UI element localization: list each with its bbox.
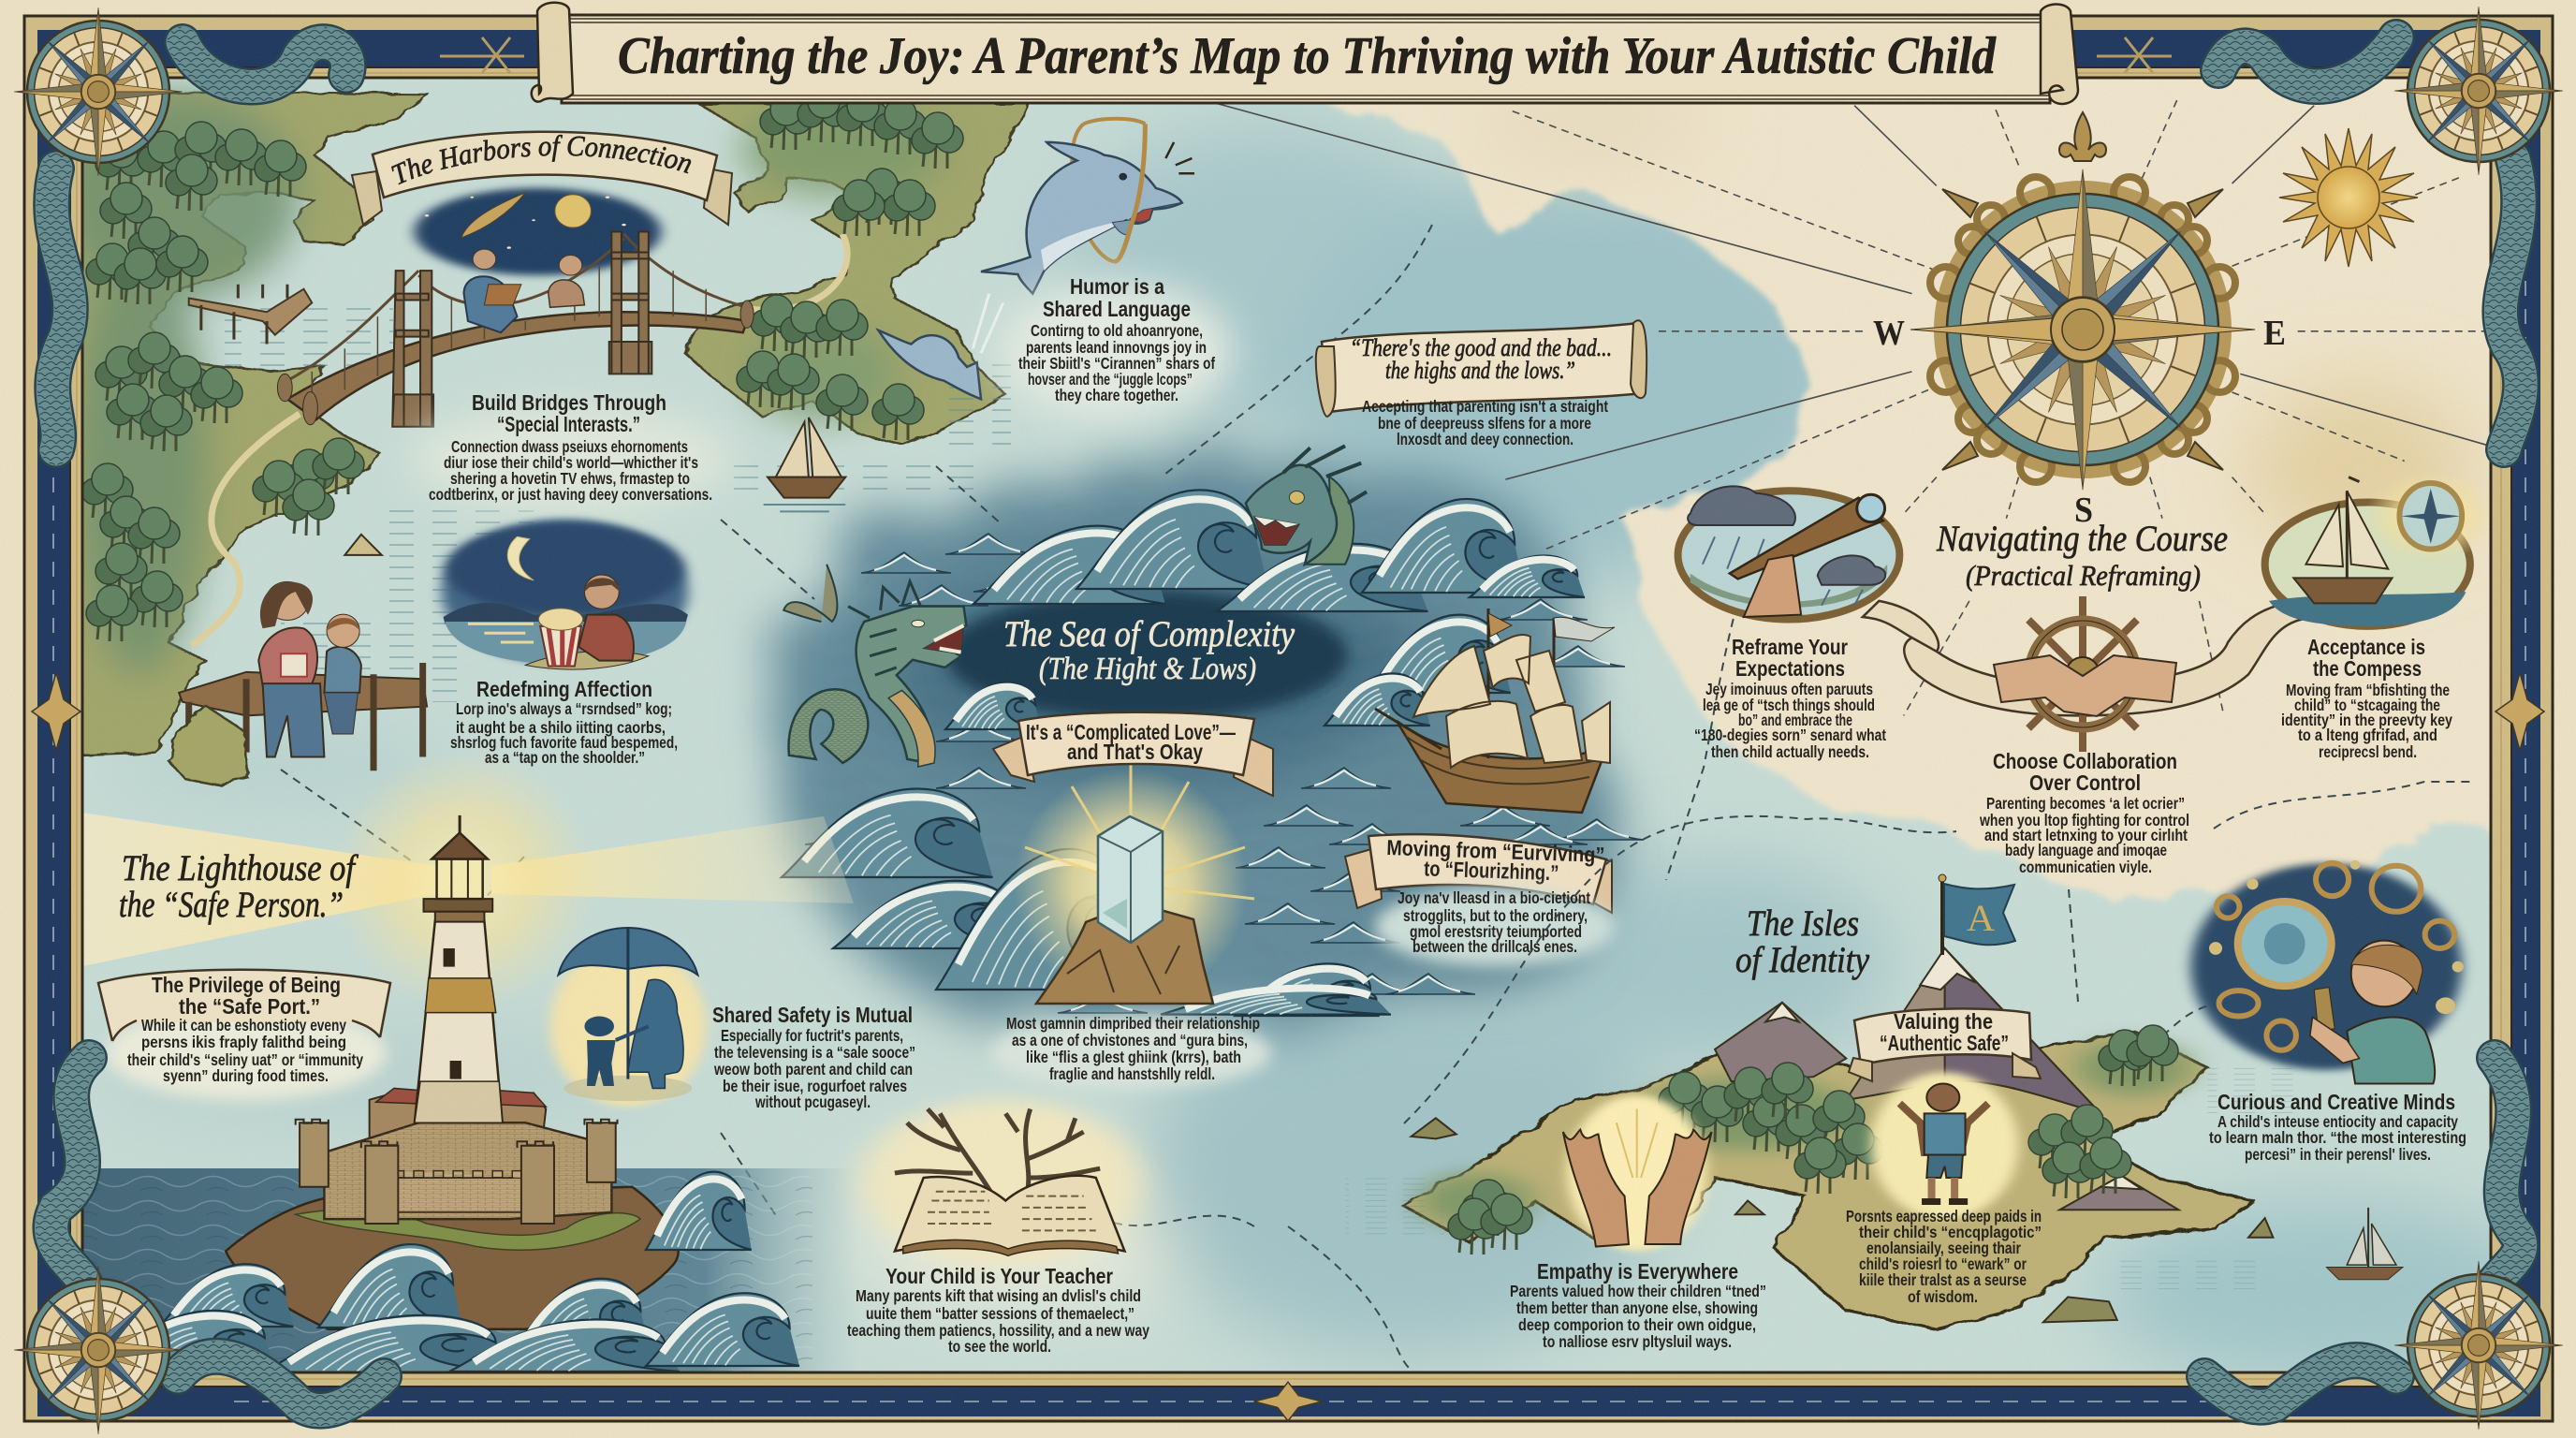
heading: isles of identity: of Identity — [1735, 940, 1870, 980]
ribbon: surviving to flourishing: to “Flourizhing.” — [1424, 856, 1559, 885]
text: choose collaboration — [1979, 749, 2189, 876]
heading: lighthouse — [119, 848, 359, 925]
text: acceptance: reciprecsl bend. — [2319, 742, 2417, 761]
dark heading field — [945, 590, 1348, 721]
lighthouse tower — [415, 815, 503, 1123]
text: shared safety — [712, 1003, 915, 1111]
text: crystal: like “flis a glest ghiink (krrs), bath — [1026, 1048, 1241, 1066]
land: harbors left and top — [50, 92, 1031, 756]
central dark sea — [774, 461, 1601, 1020]
text: your child is your teacher: teaching them patiencs, hossility, and a new way — [847, 1321, 1149, 1340]
text: moving body — [1375, 888, 1615, 966]
text: shared safety: Especially for fuctrit's parents, — [721, 1026, 903, 1045]
text: reframe: Reframe Your — [1732, 635, 1848, 659]
medallion: ship and compass — [2265, 470, 2496, 626]
title: Charting the Joy: A Parent’s Map to Thriving with Your Autistic Child — [618, 27, 1997, 85]
text: quote body: Accepting that parenting isn't a straight — [1362, 397, 1608, 416]
fleur de lis — [2059, 112, 2106, 161]
heading: The Sea of Complexity: The Sea of Complexity — [1003, 614, 1295, 654]
text: humor is a shared language: Contirng to old ahoanryone, — [1031, 321, 1203, 340]
parchment land of the compass — [1328, 79, 2490, 904]
text: redefining affection: Redefming Affection — [476, 677, 652, 701]
text: island body: child's roiesrl to “ewark” or — [1859, 1255, 2027, 1273]
text: island body: Porsnts eapressed deep paids in — [1846, 1207, 2042, 1225]
text: safe port body: persns ikis fraply falithd being — [141, 1033, 346, 1051]
sailing ship — [1375, 609, 1615, 813]
heading: navigating the course — [1936, 519, 2228, 592]
ribbon: complicated love: and That's Okay — [1067, 740, 1203, 764]
text: empathy: them better than anyone else, showing — [1516, 1299, 1758, 1317]
island trees — [1448, 1025, 2178, 1255]
heading: lighthouse: The Lighthouse of — [122, 848, 359, 888]
medallion: spyglass — [1678, 486, 1899, 620]
text: redefining affection: Lorp ino's always a “rsrndsed” kog; — [456, 699, 672, 718]
night sky above bridge — [415, 188, 661, 275]
text: curious minds: percesi” in their perensl' lives. — [2245, 1145, 2431, 1164]
text: choose collaboration: communicatien viyle. — [2019, 858, 2152, 876]
text: build bridges — [412, 390, 730, 510]
small chop waves — [805, 534, 1644, 1013]
icon: cupped hands with light — [1563, 1095, 1712, 1251]
compass letters: W — [1873, 314, 1905, 353]
text: choose collaboration: Over Control — [2029, 770, 2141, 795]
text: empathy: deep comporion to their own oidgue, — [1518, 1315, 1756, 1334]
flag with letter A — [1939, 874, 2015, 955]
ribbon: complicated love — [993, 712, 1273, 796]
left coast — [50, 92, 427, 756]
corner compass top right — [2394, 7, 2563, 175]
heading: navigating the course: (Practical Reframing) — [1966, 559, 2201, 592]
text: island body: their child's “encqplagotic” — [1859, 1223, 2042, 1241]
lighthouse sea — [82, 1168, 859, 1379]
text: reframe — [1694, 635, 1886, 761]
text: build bridges: diur iose their child's world—whicther it's — [444, 453, 698, 472]
text: moving body: strogglits, but to the ordinery, — [1403, 906, 1588, 925]
icon: umbrella over parent and child — [550, 928, 706, 1107]
text: shared safety: weow both parent and child can — [713, 1060, 913, 1078]
text: humor is a shared language — [999, 274, 1233, 421]
castle — [296, 1088, 618, 1224]
icon: small sailboat — [764, 418, 845, 511]
pier — [189, 285, 312, 345]
text: moving body: between the drillcals enes. — [1412, 937, 1577, 956]
main compass rose — [1910, 169, 2255, 490]
lighthouse beams — [82, 749, 854, 1011]
ribbon: surviving to flourishing: Moving from “Eurviving” — [1386, 835, 1605, 867]
heading: lighthouse: the “Safe Person.” — [119, 885, 344, 925]
icon: ship wheel and handshake — [1994, 596, 2176, 752]
text: your child is your teacher: Many parents kift that wising an dvlisl's child — [856, 1286, 1141, 1305]
text: curious minds: Curious and Creative Minds — [2217, 1090, 2455, 1114]
text: quote body — [1362, 397, 1608, 448]
sea serpent top — [1246, 446, 1367, 565]
waves: top crest line — [945, 490, 1585, 729]
waves: lower left of crystal — [782, 788, 1391, 1016]
small island — [168, 705, 250, 785]
text: reframe: bo” and embrace the — [1738, 711, 1852, 729]
front waves — [103, 1172, 799, 1372]
text: redefining affection: shsrlog fuch favorite faud bespemed, — [450, 733, 678, 752]
ribbon: authentic self — [1849, 1008, 2041, 1081]
text: safe port body — [127, 1016, 363, 1085]
banner: The Harbors of Connection: The Harbors of Connection — [391, 135, 691, 185]
ribbon: safe port: The Privilege of Being — [152, 973, 341, 997]
text: acceptance: the Compess — [2313, 656, 2422, 681]
text: empathy — [1510, 1259, 1766, 1351]
text: reframe: Jey imoinuus often paruuts — [1705, 680, 1873, 698]
compass letters: E — [2263, 314, 2286, 353]
heading: isles of identity: The Isles — [1747, 903, 1859, 944]
island: isles of identity — [1345, 948, 2305, 1329]
text: humor is a shared language: hovser and the “juggle lcops” — [1028, 370, 1193, 389]
text: shared safety: Shared Safety is Mutual — [712, 1003, 913, 1027]
banner: The Harbors of Connection — [350, 131, 734, 227]
text: humor is a shared language: they chare together. — [1055, 386, 1178, 404]
text: redefining affection: as a “tap on the shoolder.” — [485, 748, 645, 767]
text: island body: enolansiaily, seeing thair — [1866, 1239, 2021, 1257]
bridge with parent and child reading — [277, 231, 754, 427]
text: reframe: Expectations — [1735, 656, 1845, 681]
text: choose collaboration: and start letnxing to your cirlıht — [1984, 826, 2188, 844]
heading: navigating the course: Navigating the Course — [1936, 519, 2228, 559]
text: acceptance: Acceptance is — [2307, 635, 2425, 659]
corner compass bottom left — [14, 1266, 183, 1434]
water hatching — [225, 300, 1011, 702]
quote scroll — [1316, 320, 1647, 417]
parent and child on dock — [179, 581, 427, 770]
child figure with raised arms — [1871, 1072, 2019, 1219]
small ship and rocks near isles — [1412, 1118, 2403, 1322]
text: your child is your teacher: Your Child is Your Teacher — [886, 1264, 1113, 1288]
radiating chart lines from compass — [1124, 78, 2486, 715]
text: shared safety: without pcugaseyl. — [754, 1093, 871, 1111]
text: redefining affection: it aught be a shilo iitting caorbs, — [456, 718, 666, 737]
text: shared safety: the televensing is a “sale sooce” — [714, 1043, 915, 1062]
text: crystal: fraglie and hanstshlly reldl. — [1049, 1064, 1215, 1083]
icon: open book with tree — [862, 1100, 1141, 1265]
text: safe port body: While it can be eshonstioty eveny — [141, 1016, 346, 1034]
text: acceptance: child” to “stcagaing the — [2294, 696, 2440, 714]
crystal on rock with glow — [1014, 763, 1254, 1004]
rocky island — [226, 1187, 679, 1329]
corner compass top left — [14, 7, 183, 176]
text: crystal: as a one of chvistones and “gura bins, — [1012, 1031, 1248, 1049]
text: your child is your teacher: uuite them “batter sessions of themaelect,” — [866, 1304, 1134, 1323]
text: reframe: “180-degies sorn” senard what — [1694, 726, 1886, 744]
text: humor is a shared language: parents leand innovngs joy in — [1026, 338, 1207, 357]
text: choose collaboration: Choose Collaboration — [1993, 749, 2177, 773]
ribbon linking medallions — [1863, 601, 2302, 715]
text: build bridges: Connection dwass pseiuxs ehornoments — [451, 437, 688, 456]
text: reframe: then child actually needs. — [1711, 742, 1869, 761]
sandy path — [192, 234, 847, 646]
text: island body: of wisdom. — [1908, 1287, 1978, 1306]
text: your child is your teacher: to see the world. — [948, 1337, 1051, 1356]
text: crystal: Most gamnin dimpribed their relationship — [1006, 1014, 1260, 1033]
text: moving body: Joy na'v lleasd in a bio-cietiont — [1398, 888, 1590, 907]
compass letters: S — [2074, 491, 2093, 530]
text: build bridges: “Special Interasts.” — [497, 412, 640, 436]
parchment stains — [1479, 84, 2471, 552]
ribbon: complicated love: It's a “Complicated Love”— — [1026, 720, 1236, 744]
ribbon: safe port: the “Safe Port.” — [179, 994, 320, 1019]
vignette: curious mind with magnifier — [2191, 860, 2464, 1084]
icon: dolphin jumping through hoop — [878, 119, 1194, 399]
night vignette with popcorn — [442, 520, 688, 669]
text: island body: kiile their tralst as a seurse — [1859, 1270, 2027, 1289]
text: your child is your teacher — [847, 1264, 1149, 1356]
text: empathy: Empathy is Everywhere — [1537, 1259, 1738, 1284]
icon: sun — [2279, 128, 2418, 267]
text: quote body: lnxosdt and deey connection. — [1397, 430, 1573, 448]
green land washes — [56, 94, 945, 674]
forest trees — [81, 86, 963, 641]
corner compass bottom right — [2394, 1261, 2563, 1430]
ribbon: surviving to flourishing — [1345, 834, 1612, 913]
text: humor is a shared language: Shared Language — [1043, 297, 1191, 321]
top right peninsula — [685, 103, 1031, 445]
text: humor is a shared language: their Sbiitl's “Cirannen” shars of — [1018, 354, 1215, 373]
text: choose collaboration: when you ltop fighting for control — [1979, 811, 2189, 829]
text: moving body: gmol erestsrity teiumported — [1410, 922, 1582, 941]
compass letters — [1873, 314, 2286, 530]
text: empathy: Parents valued how their children “tned” — [1510, 1282, 1766, 1300]
text: humor is a shared language: Humor is a — [1070, 274, 1164, 299]
text: choose collaboration: Parenting becomes ‘a let ocrier” — [1986, 794, 2185, 813]
text: curious minds — [2209, 1090, 2466, 1164]
text: reframe: lea ge of “tsch things should — [1703, 696, 1875, 714]
ribbon: authentic self: Valuing the — [1894, 1009, 1993, 1034]
text: quote body: bne of deepreuss slfens for a more — [1378, 414, 1591, 433]
text: acceptance: Moving fram “bfishting the — [2286, 681, 2450, 699]
left sea dragon — [783, 565, 966, 767]
dashed route lines — [281, 225, 2471, 1372]
title scroll — [532, 3, 2078, 104]
heading: isles of identity — [1735, 903, 1870, 980]
text: curious minds: to learn maln thor. “the most interesting — [2209, 1128, 2466, 1147]
scroll ornaments — [1930, 177, 2235, 482]
quote scroll: “There's the good and the bad... — [1350, 334, 1612, 361]
text: safe port body: their child's “seliny uat” or “immunity — [127, 1050, 363, 1069]
text: crystal — [990, 1014, 1271, 1089]
text: island body — [1846, 1207, 2042, 1306]
text: shared safety: be their isue, rogurfoet ralves — [723, 1077, 907, 1095]
text: build bridges: Build Bridges Through — [472, 390, 666, 415]
quote scroll: the highs and the lows.” — [1385, 357, 1575, 384]
flag with letter A: A — [1967, 897, 1995, 939]
ribbon: authentic self: “Authentic Safe” — [1880, 1031, 2009, 1055]
heading: The Sea of Complexity: (The Hight & Lows) — [1039, 652, 1256, 686]
heading: The Sea of Complexity — [1003, 614, 1295, 686]
text: acceptance: to a lteng gfrifad, and — [2298, 726, 2437, 744]
mountains — [1715, 948, 2179, 1210]
text: safe port body: syenn” during food times. — [163, 1066, 329, 1085]
text: choose collaboration: bady language and imoqae — [2005, 841, 2167, 859]
rock in bay — [344, 535, 382, 555]
text: redefining affection — [450, 677, 678, 767]
text: build bridges: codtberinx, or just having deey conversations. — [429, 485, 712, 504]
text: curious minds: A child's inteuse entiocity and capacity — [2217, 1112, 2458, 1131]
text: empathy: to nalliose esrv pltysluil ways. — [1543, 1332, 1732, 1351]
text: acceptance: identity” in the preevty key — [2281, 711, 2452, 729]
ribbon: safe port — [98, 970, 390, 1100]
text: acceptance — [2281, 635, 2452, 761]
text: build bridges: shering a hovetin TV ehws, frmastep to — [450, 469, 690, 488]
